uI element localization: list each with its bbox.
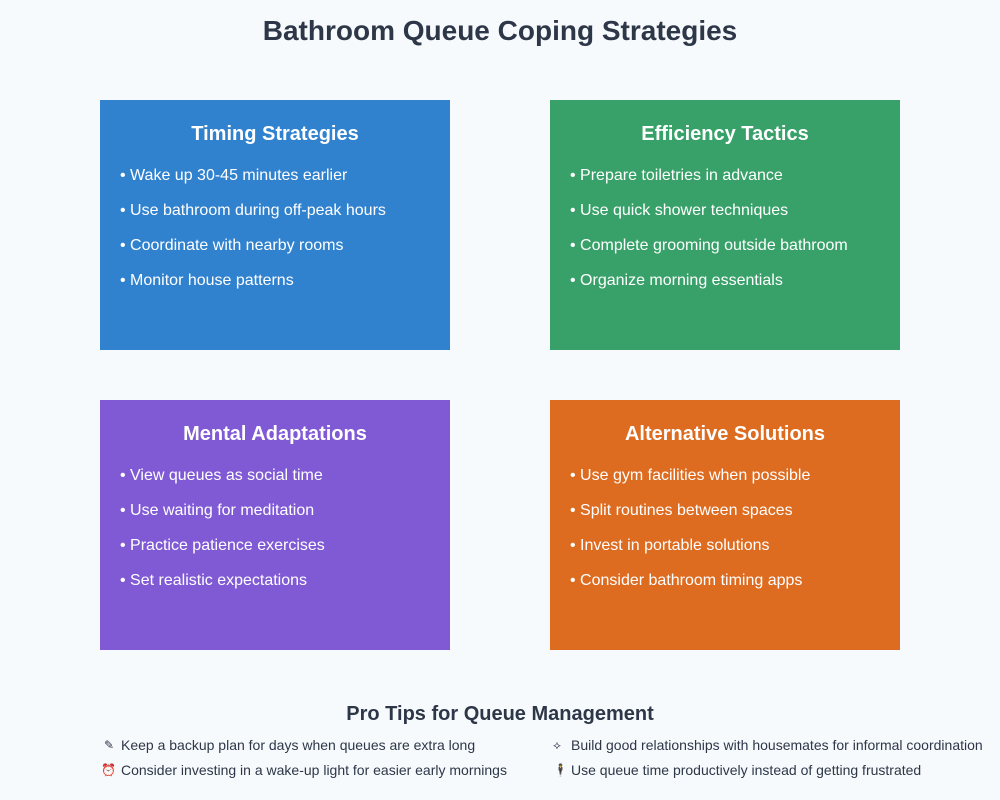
panel: efficiency: • Complete grooming outside bathroom bbox=[570, 237, 848, 254]
panel: alternative: • Use gym facilities when possible bbox=[570, 467, 810, 484]
panel: alternative: • Invest in portable solutions bbox=[570, 537, 770, 554]
icon: person: 🕴 bbox=[553, 763, 568, 777]
panel: mental bbox=[100, 400, 450, 650]
panel: timing: • Use bathroom during off-peak hours bbox=[120, 202, 386, 219]
panel: efficiency: • Use quick shower techniques bbox=[570, 202, 788, 219]
pro tips heading: Pro Tips for Queue Management bbox=[346, 703, 654, 725]
tip 3: Consider investing in a wake-up light for easier early mornings bbox=[121, 762, 507, 778]
panel: mental: • Set realistic expectations bbox=[120, 572, 307, 589]
panel: alternative bbox=[550, 400, 900, 650]
panel: efficiency: Efficiency Tactics bbox=[641, 123, 809, 145]
panel: timing bbox=[100, 100, 450, 350]
tip 1: Keep a backup plan for days when queues are extra long bbox=[121, 737, 475, 753]
panel: alternative: Alternative Solutions bbox=[625, 423, 825, 445]
panel: efficiency: • Organize morning essentials bbox=[570, 272, 783, 289]
panel: timing: • Coordinate with nearby rooms bbox=[120, 237, 343, 254]
panel: timing: • Wake up 30-45 minutes earlier bbox=[120, 167, 347, 184]
panel: mental: • Practice patience exercises bbox=[120, 537, 325, 554]
panel: efficiency: • Prepare toiletries in advance bbox=[570, 167, 783, 184]
icon: alarm clock: ⏰ bbox=[101, 763, 116, 777]
panel: mental: • View queues as social time bbox=[120, 467, 323, 484]
panel: efficiency bbox=[550, 100, 900, 350]
icon: pencil: ✎ bbox=[104, 738, 114, 752]
icon: handshake: ⟡ bbox=[553, 738, 561, 752]
panel: timing: • Monitor house patterns bbox=[120, 272, 294, 289]
title: Bathroom Queue Coping Strategies bbox=[263, 15, 737, 46]
tip 4: Use queue time productively instead of getting frustrated bbox=[571, 762, 921, 778]
panel: mental: • Use waiting for meditation bbox=[120, 502, 314, 519]
panel: timing: Timing Strategies bbox=[191, 123, 359, 145]
tip 2: Build good relationships with housemates for informal coordination bbox=[571, 737, 983, 753]
panel: alternative: • Consider bathroom timing apps bbox=[570, 572, 802, 589]
panel: mental: Mental Adaptations bbox=[183, 423, 367, 445]
panel: alternative: • Split routines between spaces bbox=[570, 502, 793, 519]
